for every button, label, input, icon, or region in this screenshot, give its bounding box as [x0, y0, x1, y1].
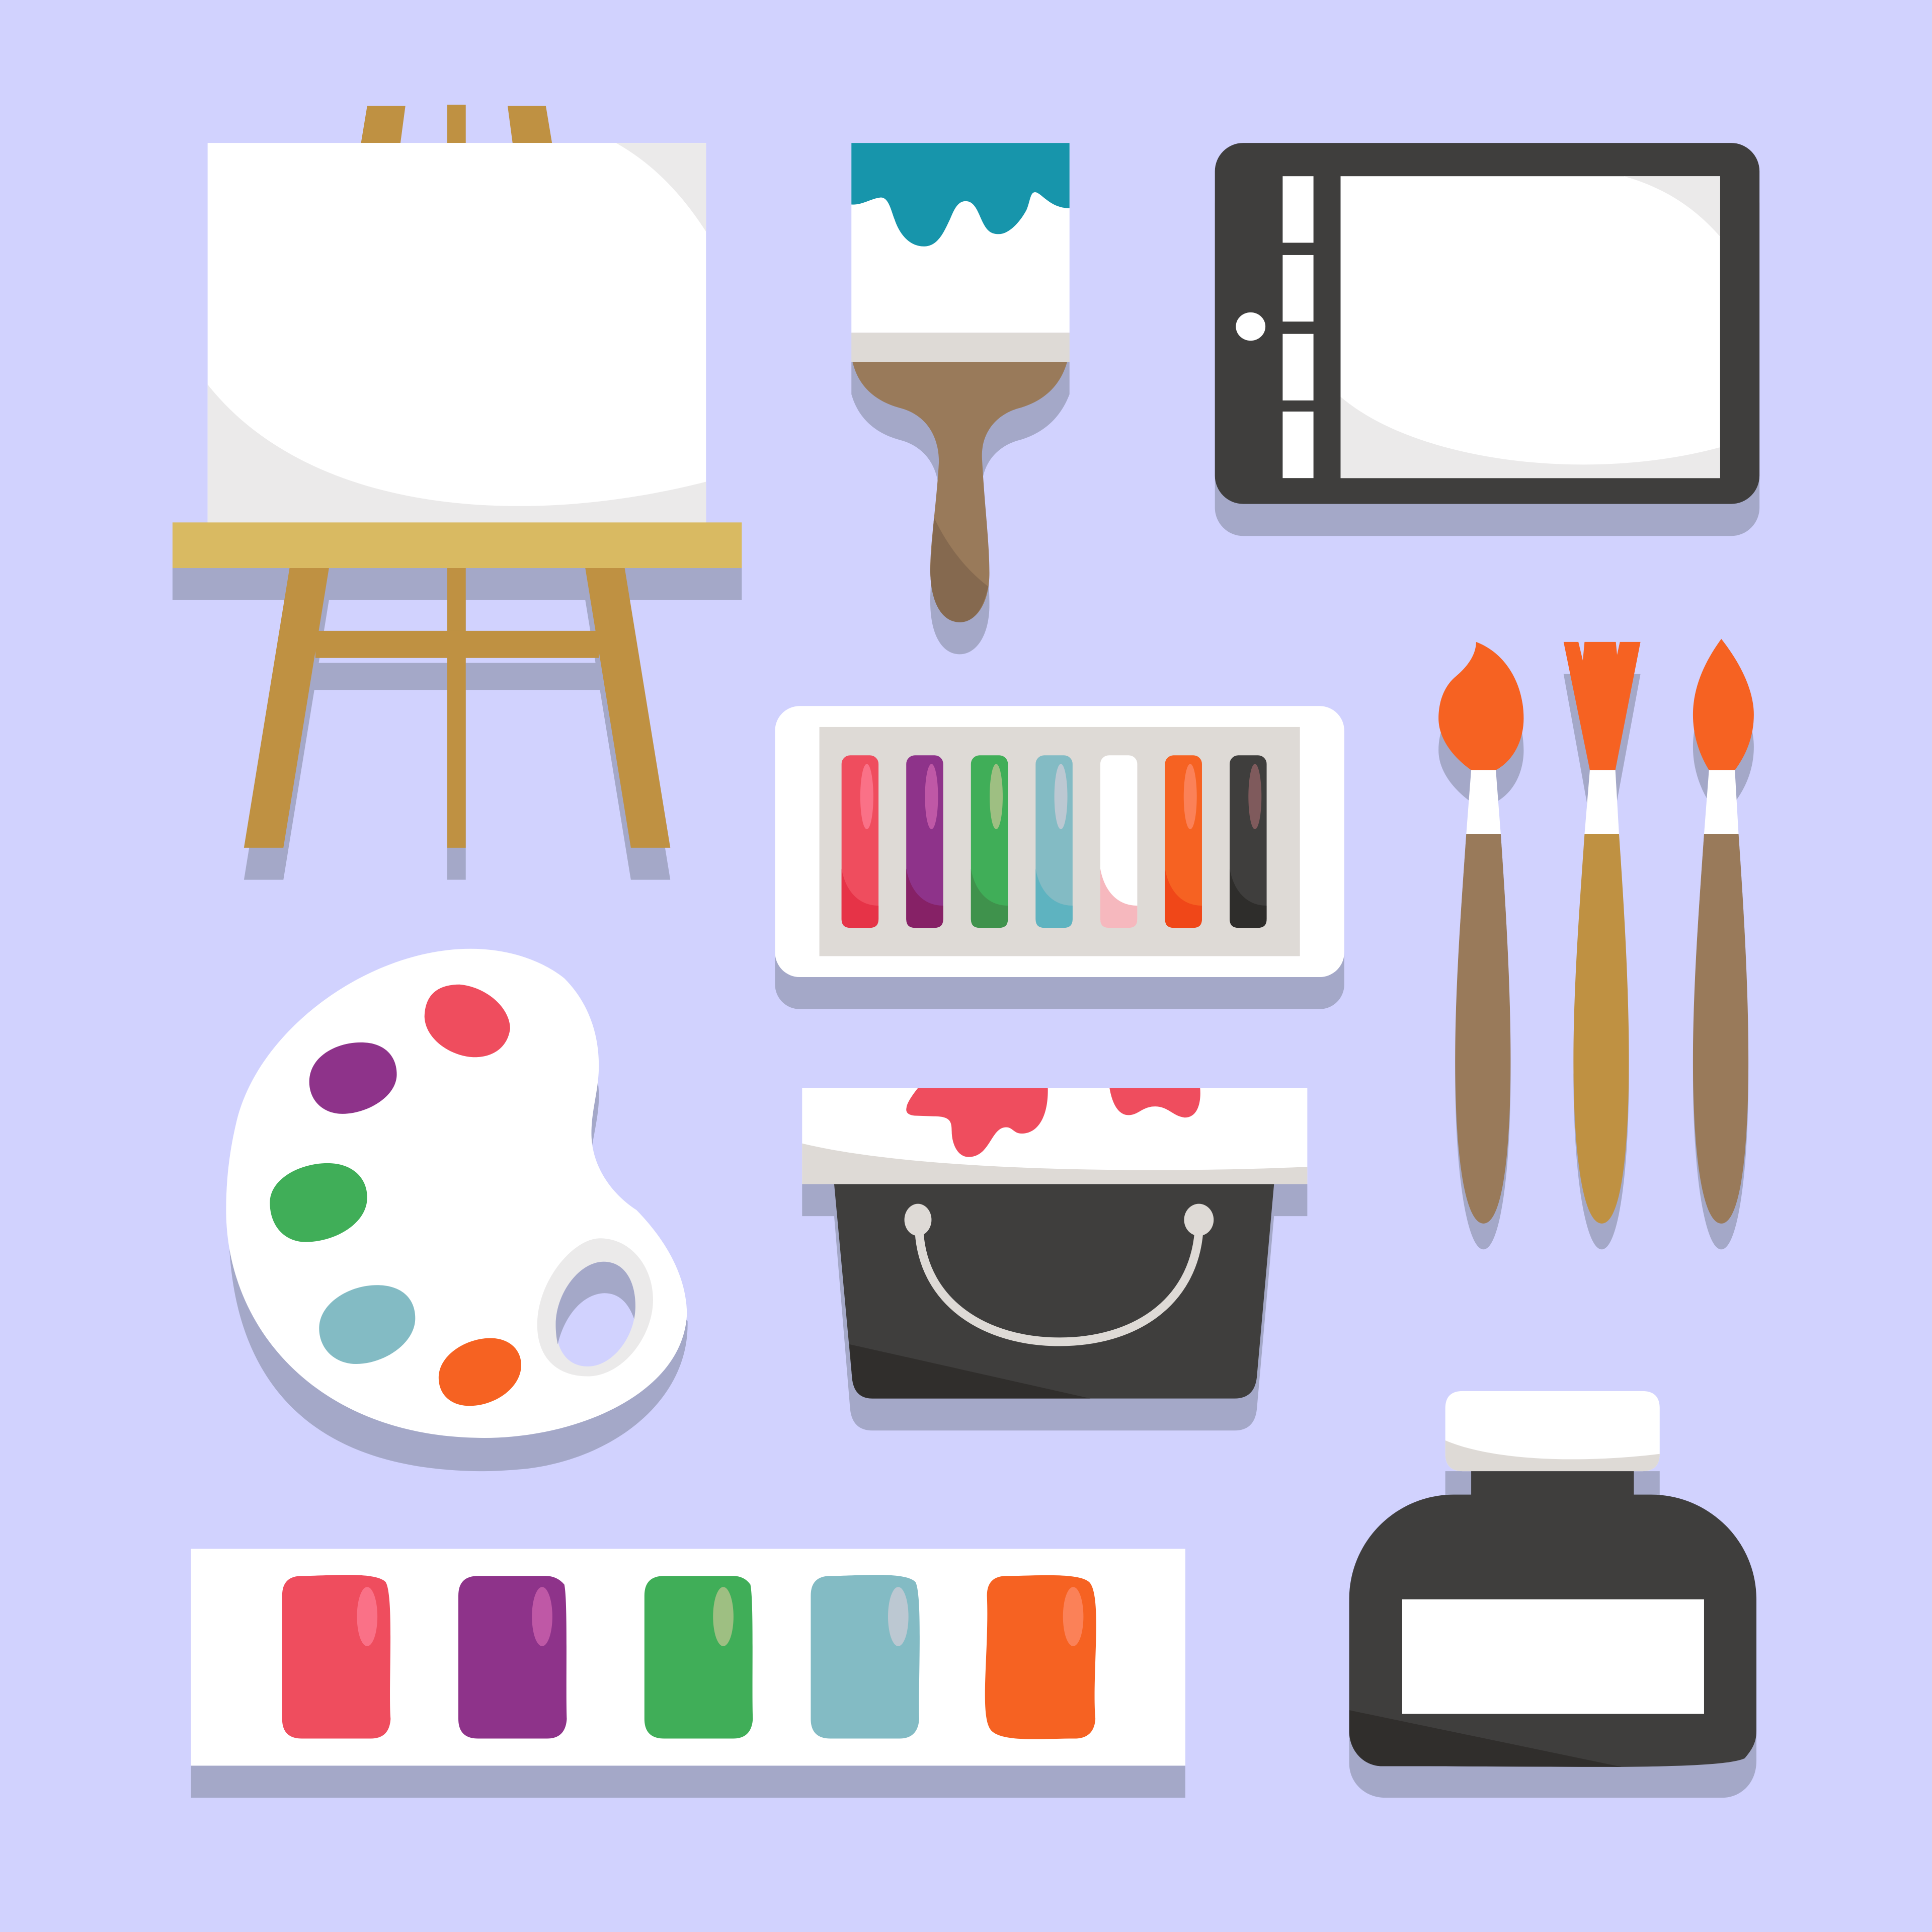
easel shadow [173, 568, 742, 880]
tube: orange [1165, 755, 1202, 928]
icon: ink bottle [1349, 1391, 1756, 1798]
bottle label [1402, 1599, 1704, 1714]
pan: red [282, 1575, 390, 1739]
pan: light blue [811, 1575, 920, 1739]
icon: artist palette [226, 949, 688, 1471]
canvas [208, 143, 706, 522]
tablet body [1215, 143, 1759, 504]
icon: fan brush [1564, 642, 1641, 1249]
fan brush handle [1573, 834, 1629, 1224]
tube: red [842, 755, 878, 928]
pointed brush handle [1693, 834, 1748, 1224]
fan brush head [1564, 642, 1641, 770]
tube: white [1100, 755, 1137, 928]
pan: purple [458, 1576, 567, 1739]
tablet side buttons [1236, 176, 1314, 478]
pointed brush shadow [1693, 670, 1754, 1249]
fan brush shadow [1564, 674, 1641, 1249]
icon: round brush [1438, 642, 1523, 1249]
fan brush ferrule [1584, 770, 1619, 834]
icon: paint tube box [775, 706, 1344, 1009]
tablet shadow [1215, 175, 1759, 536]
round brush shadow [1438, 674, 1523, 1249]
tube: black [1230, 755, 1267, 928]
icon: watercolor pan tray [191, 1549, 1185, 1798]
box shadow [775, 738, 1344, 1009]
tray [191, 1549, 1185, 1765]
bottle body [1349, 1471, 1756, 1767]
easel legs [244, 105, 670, 848]
palette shadow [229, 1081, 688, 1471]
easel shelf [173, 522, 742, 568]
icon: pointed brush [1693, 639, 1754, 1249]
tablet screen [1340, 176, 1720, 478]
tube: green [971, 755, 1008, 928]
brush bristles [851, 143, 1070, 333]
brush handle [853, 362, 1067, 622]
bucket lid [802, 1088, 1307, 1184]
paint blob: red [425, 985, 510, 1057]
bucket shadow [802, 1184, 1307, 1430]
brush shadow [851, 362, 1070, 654]
pointed brush ferrule [1704, 770, 1739, 834]
pan: green [645, 1576, 753, 1739]
tray shadow [191, 1765, 1185, 1798]
round brush handle [1455, 834, 1510, 1224]
pointed brush head [1693, 639, 1754, 770]
box inner tray [820, 727, 1300, 956]
tube: purple [906, 755, 943, 928]
icon: easel with canvas [173, 105, 742, 880]
pan: orange [985, 1575, 1096, 1739]
tube: light blue [1035, 755, 1073, 928]
paint blob: purple [309, 1042, 397, 1114]
round brush ferrule [1466, 770, 1501, 834]
paint blob: green [270, 1163, 367, 1242]
paint blob: light blue [319, 1285, 415, 1364]
round brush head [1438, 642, 1523, 770]
brush ferrule [851, 333, 1070, 362]
paint on bristles [851, 143, 1070, 247]
bottle shadow [1349, 1471, 1756, 1798]
palette thumb hole [537, 1238, 653, 1377]
icon: flat paint brush [851, 143, 1070, 654]
bottle cap [1445, 1391, 1660, 1471]
bucket handle [905, 1204, 1214, 1342]
box [775, 706, 1344, 977]
icon: paint bucket [802, 1088, 1307, 1430]
icon: tablet [1215, 143, 1759, 536]
bucket body [834, 1184, 1274, 1399]
paint blob: orange [439, 1338, 521, 1406]
palette board [226, 949, 687, 1438]
paint drip left [906, 1088, 1048, 1157]
paint drip right [1109, 1088, 1200, 1117]
